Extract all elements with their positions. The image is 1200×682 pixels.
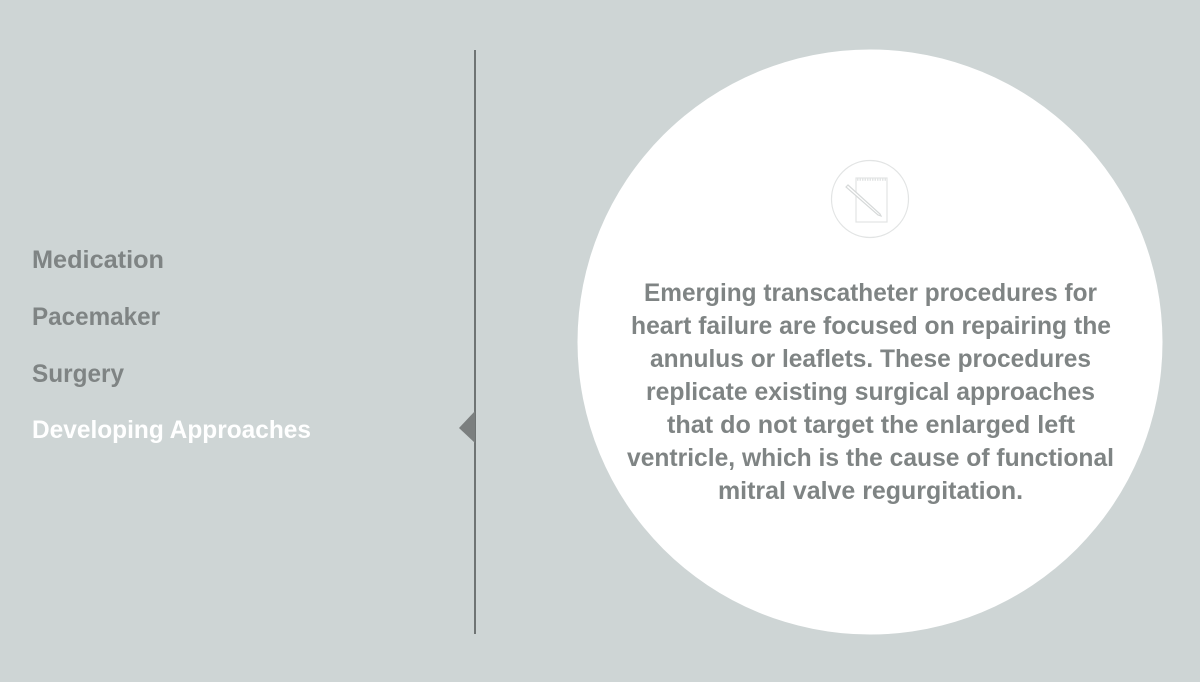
menu item: Medication: Medication xyxy=(32,246,164,274)
menu item: Surgery: Surgery xyxy=(32,360,124,388)
icon: notepad and pencil xyxy=(832,160,908,238)
arrow pointer: active item marker xyxy=(459,411,475,443)
body text: annulus or leaflets. These procedures xyxy=(650,345,1091,373)
body text: heart failure are focused on repairing the xyxy=(631,312,1111,340)
body text: replicate existing surgical approaches xyxy=(646,378,1095,406)
vertical divider line xyxy=(474,50,476,634)
navigation menu xyxy=(32,246,311,444)
body text xyxy=(627,279,1114,505)
menu item: Developing Approaches (active): Developing Approaches xyxy=(32,416,311,444)
menu item: Pacemaker: Pacemaker xyxy=(32,303,160,331)
body text: that do not target the enlarged left xyxy=(667,411,1076,439)
body text: ventricle, which is the cause of functional xyxy=(627,444,1114,472)
body text: mitral valve regurgitation. xyxy=(718,477,1023,505)
panel: white circle xyxy=(578,50,1162,634)
body text: Emerging transcatheter procedures for xyxy=(644,279,1097,307)
